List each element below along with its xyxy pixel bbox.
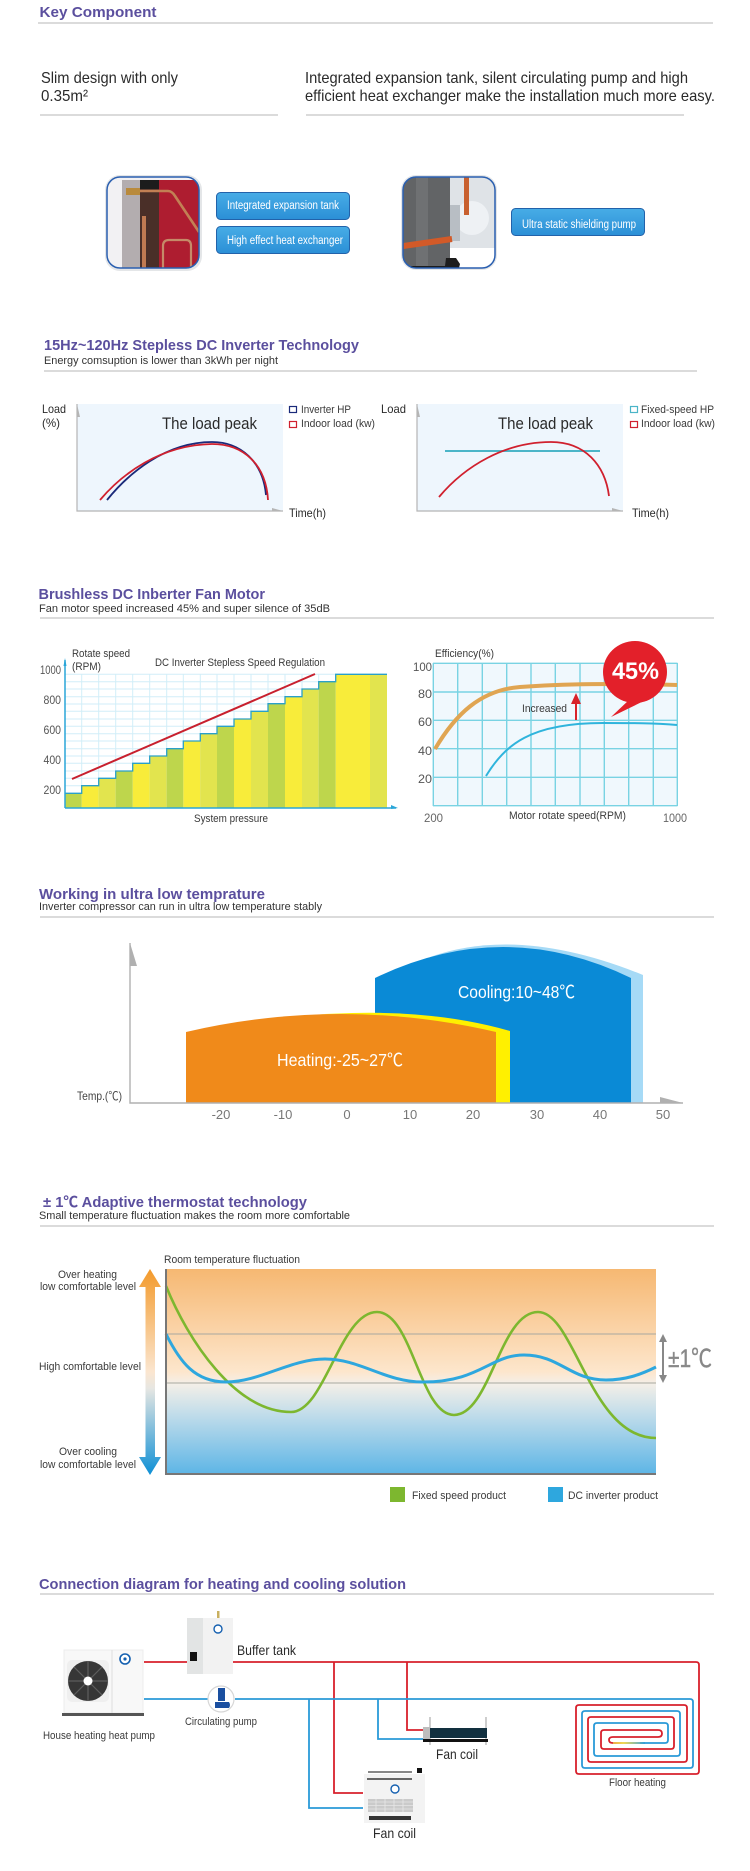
chart: inverter hp load: (%) (42, 416, 60, 430)
chart: rotate speed stepped bars: System pressure (194, 813, 268, 825)
heading: fan motor (38, 586, 714, 618)
chart: fixed speed hp load: Time(h) (632, 506, 669, 520)
area: heating range (186, 1013, 510, 1103)
chart: operating temperature range: -20 (212, 1107, 230, 1122)
chart: room temperature fluctuation (164, 1254, 656, 1474)
chart: rotate speed stepped bars: 800 (44, 695, 61, 707)
button: integrated expansion tank (216, 192, 350, 220)
icon: buffer tank (187, 1611, 233, 1674)
section: adaptive thermostat (39, 1194, 714, 1502)
section: connection diagram (39, 1576, 714, 1841)
chart: inverter hp load: Load (42, 402, 66, 416)
labels: connection diagram: House heating heat pump (43, 1730, 155, 1742)
chart: fan efficiency: 40 (418, 746, 432, 758)
photo: shielding pump (401, 175, 497, 270)
section: ultra low temperature (39, 886, 714, 1122)
chart: fan efficiency: 100 (413, 662, 432, 674)
chart: room temperature fluctuation: Room temperature fluctuation (164, 1254, 300, 1266)
chart: fan efficiency: 20 (418, 774, 432, 786)
callout: 45% bubble: 45% (612, 658, 659, 685)
chart: fixed speed hp load (381, 402, 715, 520)
heading: ultra low temperature: Inverter compressor can run in ultra low temperature stably (39, 901, 322, 913)
chart: fan efficiency: 200 (424, 813, 443, 825)
icon: floor fan coil (364, 1768, 425, 1823)
chart: operating temperature range: Temp.(℃) (77, 1089, 122, 1103)
labels: connection diagram (43, 1642, 666, 1841)
icon: house heat pump (62, 1650, 144, 1716)
icon: ceiling fan coil (423, 1717, 488, 1745)
heading: fan motor: Fan motor speed increased 45% and super silence of 35dB (39, 603, 330, 615)
text: slim design: 0.35m² (41, 88, 89, 105)
pipes: return water (144, 1699, 693, 1808)
text: comfort levels: High comfortable level (39, 1361, 141, 1373)
chart: rotate speed stepped bars: 200 (44, 785, 61, 797)
section: key component (38, 4, 715, 271)
chart: fan efficiency: Efficiency(%) (435, 648, 494, 660)
chart: fixed speed hp load: The load peak (498, 414, 593, 433)
callout: plus minus 1 degree (659, 1334, 712, 1383)
area: cooling range (375, 945, 643, 1103)
legend: fixed speed product: Fixed speed product (412, 1490, 506, 1502)
chart: fan efficiency: Increased (522, 703, 567, 715)
chart: fan efficiency: Motor rotate speed(RPM) (509, 810, 626, 822)
labels: connection diagram: Fan coil (373, 1825, 416, 1841)
chart: inverter hp load: Time(h) (289, 506, 326, 520)
callout: 45% bubble (603, 641, 667, 717)
chart: fan efficiency: 60 (418, 717, 432, 729)
chart: rotate speed stepped bars: DC Inverter Stepless Speed Regulation (155, 657, 325, 669)
chart: inverter hp load (42, 402, 375, 520)
chart: operating temperature range: 0 (343, 1107, 351, 1122)
heading: stepless dc inverter: Energy comsuption is lower than 3kWh per night (44, 355, 278, 367)
chart: rotate speed stepped bars (40, 648, 398, 825)
text: comfort levels: Over heating (58, 1269, 117, 1281)
arrow: increased (571, 693, 581, 720)
heading: stepless dc inverter: 15Hz~120Hz Stepless DC Inverter Technology (44, 337, 360, 354)
chart: operating temperature range: 40 (593, 1107, 607, 1122)
chart: fixed speed hp load: Load (381, 402, 406, 416)
chart: rotate speed stepped bars: (RPM) (72, 661, 101, 673)
chart: operating temperature range: 50 (656, 1107, 670, 1122)
section: stepless dc inverter (42, 337, 715, 520)
labels: connection diagram: Fan coil (436, 1746, 478, 1762)
heading: adaptive thermostat: Small temperature fluctuation makes the room more comfortable (39, 1210, 350, 1222)
area: cooling range: Cooling:10~48℃ (458, 982, 575, 1002)
chart: operating temperature range: 10 (403, 1107, 417, 1122)
chart: fixed speed hp load: Fixed-speed HP (641, 404, 714, 416)
heading: fan motor: Brushless DC Inberter Fan Motor (38, 586, 265, 603)
chart: rotate speed stepped bars: 1000 (40, 665, 61, 677)
section: fan motor (38, 586, 714, 825)
button: high effect heat exchanger (216, 226, 350, 254)
heading: ultra low temperature: Working in ultra low temprature (39, 886, 265, 903)
labels: connection diagram: Buffer tank (237, 1642, 297, 1658)
text: comfort levels: low comfortable level (40, 1281, 136, 1293)
chart: rotate speed stepped bars: Rotate speed (72, 648, 130, 660)
heading: adaptive thermostat (39, 1194, 714, 1226)
labels: connection diagram: Circulating pump (185, 1716, 257, 1728)
heading: adaptive thermostat: ± 1℃ Adaptive thermostat technology (43, 1194, 308, 1211)
heading: ultra low temperature (39, 886, 714, 917)
heading: connection diagram: Connection diagram for heating and cooling solution (39, 1576, 406, 1593)
text: integrated components (305, 70, 715, 115)
photo: expansion tank and heat exchanger (105, 175, 202, 271)
area: heating range: Heating:-25~27℃ (277, 1050, 403, 1070)
arrow: comfort scale (139, 1269, 161, 1475)
chart: fan efficiency: 1000 (663, 813, 687, 825)
text: integrated components: Integrated expansion tank, silent circulating pump and high (305, 70, 688, 87)
chart: operating temperature range: 30 (530, 1107, 544, 1122)
legend: dc inverter product: DC inverter product (568, 1490, 658, 1502)
chart: rotate speed stepped bars: 400 (44, 755, 61, 767)
pipes: hot water (144, 1662, 699, 1793)
button: integrated expansion tank: Integrated expansion tank (227, 200, 339, 212)
callout: plus minus 1 degree: ±1℃ (668, 1345, 712, 1373)
chart: rotate speed stepped bars: 600 (44, 725, 61, 737)
heading: key component: Key Component (40, 4, 156, 21)
chart: inverter hp load: Inverter HP (301, 404, 351, 416)
chart: operating temperature range: 20 (466, 1107, 480, 1122)
text: comfort levels: Over cooling (59, 1446, 117, 1458)
text: slim design: Slim design with only (41, 70, 178, 87)
text: comfort levels: low comfortable level (40, 1459, 136, 1471)
icon: circulating pump (208, 1686, 234, 1712)
chart: fan efficiency (413, 641, 687, 825)
button: high effect heat exchanger: High effect heat exchanger (227, 235, 343, 247)
legend: fixed speed product (390, 1487, 506, 1502)
chart: operating temperature range: -10 (274, 1107, 292, 1122)
legend: dc inverter product (548, 1487, 658, 1502)
labels: connection diagram: Floor heating (609, 1777, 666, 1789)
chart: inverter hp load: The load peak (162, 414, 257, 433)
heading: stepless dc inverter (44, 337, 697, 371)
button: ultra static shielding pump (512, 208, 644, 236)
button: ultra static shielding pump: Ultra static shielding pump (522, 219, 636, 231)
chart: operating temperature range (77, 943, 683, 1122)
chart: inverter hp load: Indoor load (kw) (301, 418, 375, 430)
text: comfort levels (39, 1269, 141, 1471)
text: slim design (40, 70, 278, 115)
chart: fixed speed hp load: Indoor load (kw) (641, 418, 715, 430)
text: integrated components: efficient heat exchanger make the installation much more easy. (305, 88, 715, 105)
chart: fan efficiency: 80 (418, 689, 432, 701)
